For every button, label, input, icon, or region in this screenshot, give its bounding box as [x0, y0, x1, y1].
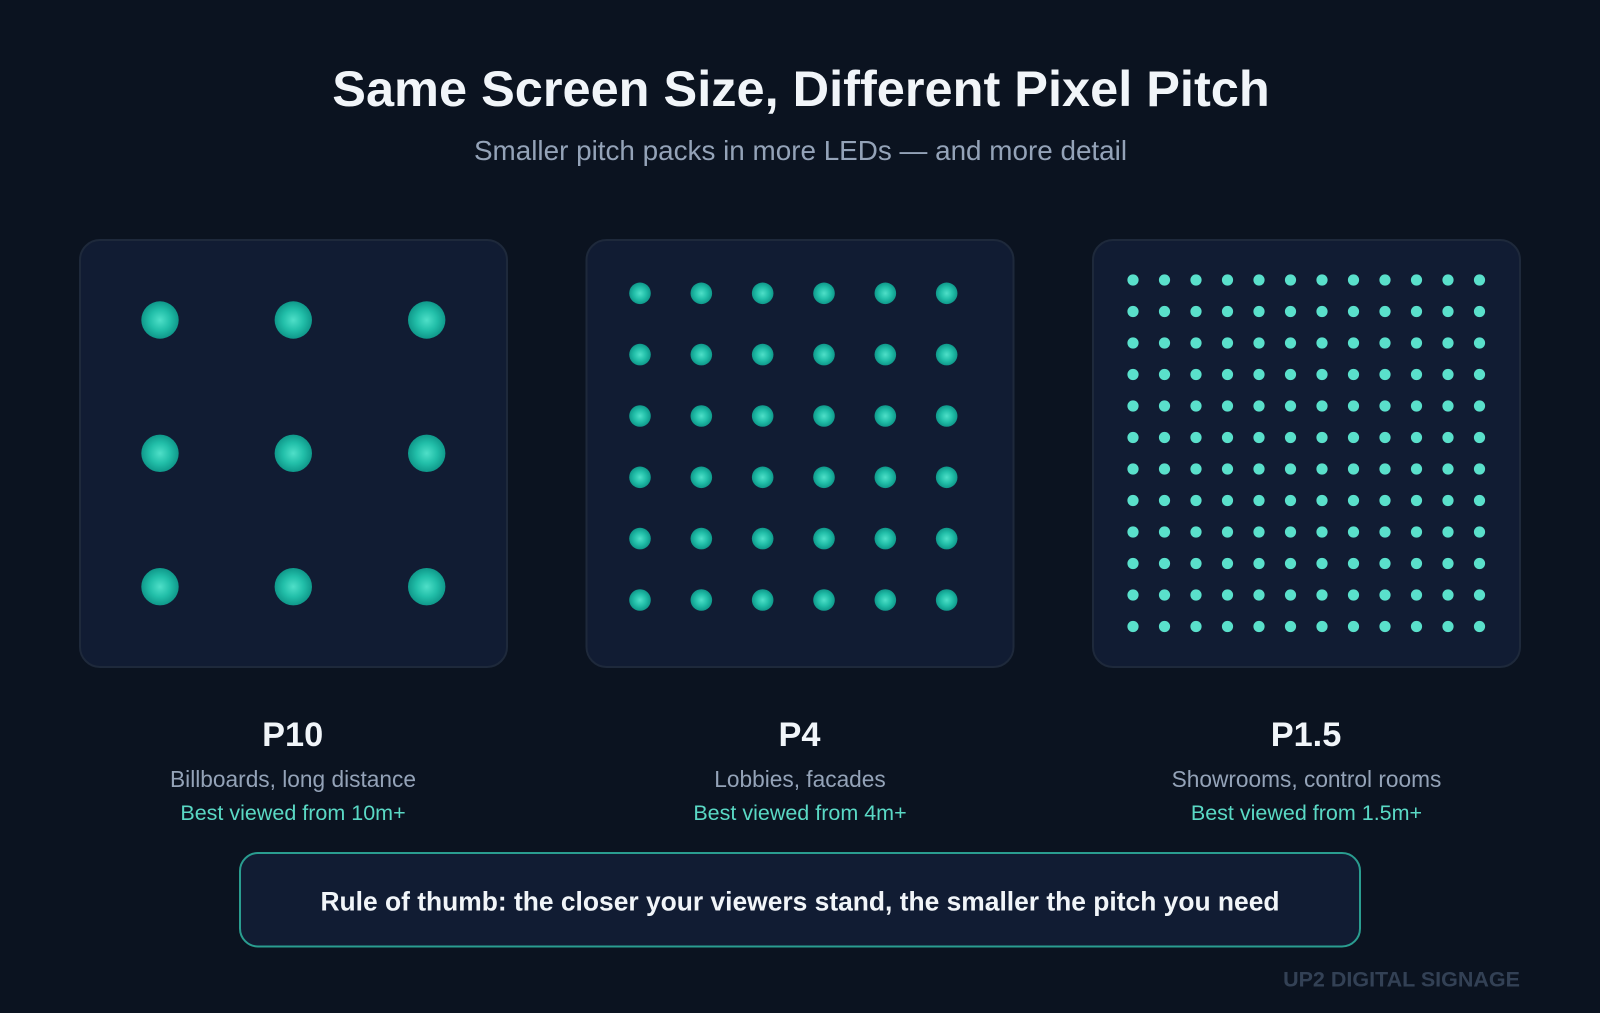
caption: P10 [170, 716, 416, 825]
caption: P10: Billboards, long distance [170, 766, 416, 792]
caption: P4: Lobbies, facades [714, 766, 886, 792]
callout: rule of thumb: Rule of thumb: the closer your viewers stand, the smaller the pitch you need [320, 886, 1280, 916]
panel: P1.5 LED grid [1093, 240, 1520, 667]
footer brand: UP2 DIGITAL SIGNAGE [1283, 968, 1520, 992]
panel: P4 LED grid [586, 240, 1014, 667]
caption: P4 [693, 716, 907, 825]
panel: P10 LED grid [80, 240, 507, 667]
caption: P1.5: P1.5 [1271, 716, 1341, 754]
subtitle: Smaller pitch packs in more LEDs — and more detail [474, 135, 1127, 166]
caption: P1.5 [1172, 716, 1441, 825]
callout: rule of thumb [240, 853, 1360, 946]
caption: P1.5: Showrooms, control rooms [1172, 766, 1441, 792]
title: Same Screen Size, Different Pixel Pitch [332, 60, 1270, 117]
caption: P4: P4 [779, 716, 820, 754]
caption: P10: Best viewed from 10m+ [180, 801, 406, 825]
caption: P4: Best viewed from 4m+ [693, 801, 907, 825]
caption: P10: P10 [262, 716, 323, 754]
caption: P1.5: Best viewed from 1.5m+ [1191, 801, 1422, 825]
